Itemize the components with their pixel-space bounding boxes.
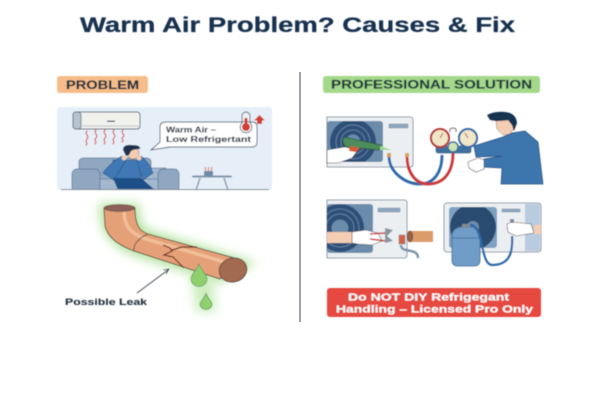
- title: Warm Air Problem? Causes & Fix: [80, 14, 515, 37]
- speech bubble: Warm Air –: [166, 125, 216, 135]
- pipe repair illustration: [316, 200, 433, 258]
- speech bubble: Low Refrigertant: [166, 134, 251, 144]
- copper pipe stub: [408, 231, 433, 242]
- hoses: [389, 153, 453, 184]
- panel: problem: [57, 76, 272, 312]
- copper pipe with leak: [65, 204, 250, 312]
- side table with plant: [192, 167, 232, 190]
- solution badge: [323, 76, 540, 93]
- solution badge: PROFESSIONAL SOLUTION: [331, 78, 532, 92]
- manifold gauges: [431, 128, 477, 153]
- arm and gloved hand: [327, 232, 352, 243]
- panel: professional solution: [316, 76, 543, 317]
- green glow: [104, 208, 245, 278]
- refrigerant tank: [452, 227, 480, 266]
- problem badge: [57, 76, 148, 93]
- warning banner: Do NOT DIY Refrigegant: [348, 292, 510, 304]
- icon: thermometer: [240, 112, 252, 133]
- sofa: [72, 158, 179, 192]
- gauge check illustration: [327, 112, 543, 184]
- warning banner: Handling – Licensed Pro Only: [336, 303, 533, 315]
- pipe body: [104, 208, 238, 279]
- icon: rising arrow: [254, 115, 265, 124]
- floor line: [61, 188, 269, 190]
- room scene illustration: [57, 107, 272, 192]
- valve and hose: [399, 235, 405, 244]
- gloved hand: [507, 222, 534, 236]
- column divider: [299, 72, 301, 322]
- hand with leak detector: [327, 137, 392, 163]
- charging hose: [470, 225, 512, 265]
- leak label: Possible Leak: [65, 297, 148, 307]
- person feeling hot: [103, 145, 155, 190]
- technician: [468, 112, 543, 184]
- outdoor unit: [327, 117, 413, 167]
- icon: air conditioner: [73, 112, 140, 129]
- icon: leak drops: [191, 264, 207, 286]
- problem badge: PROBLEM: [66, 78, 139, 92]
- recharge illustration: [444, 203, 541, 266]
- icon: heat waves: [86, 130, 124, 145]
- warning banner: [327, 288, 541, 317]
- crack: [163, 245, 197, 268]
- speech bubble: [151, 122, 257, 150]
- wrench: [370, 233, 386, 241]
- leak arrow: [137, 269, 169, 293]
